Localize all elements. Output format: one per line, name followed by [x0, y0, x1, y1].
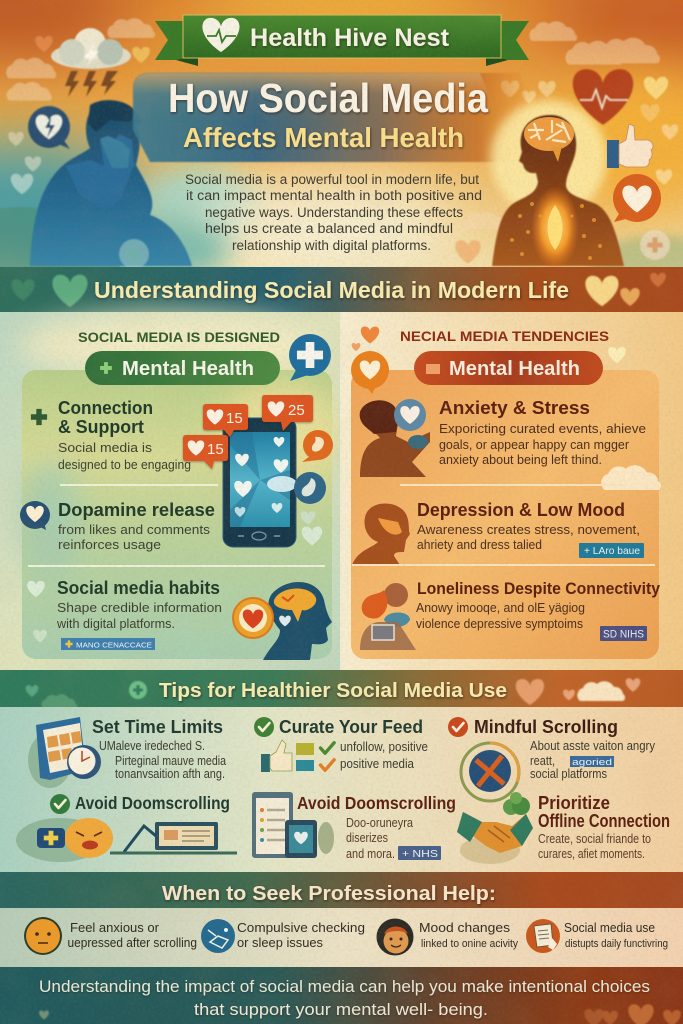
- badge: likes 15 lower: [183, 435, 228, 469]
- icon: blue bubble: [294, 472, 326, 504]
- tip: prioritize offline connection: [457, 792, 670, 861]
- tag: + NHS: [402, 848, 438, 860]
- title panel: [133, 73, 540, 162]
- icon: calendar and clock: [36, 717, 101, 780]
- tip: avoid doomscrolling left: [37, 793, 237, 858]
- item: connection and support: Social media is: [58, 440, 153, 455]
- item: connection and support: [31, 398, 191, 472]
- illustration: phone: [223, 418, 297, 547]
- closing message: that support your mental well- being.: [194, 1000, 488, 1019]
- badge: likes 15 lower: 15: [207, 441, 224, 458]
- item: dopamine release: from likes and comments: [58, 522, 211, 537]
- decorative hearts and clouds in hero: [6, 18, 678, 264]
- sign: anxious after scrolling: [24, 917, 197, 955]
- item: anxiety and stress: Exporicting curated events, ahieve: [439, 421, 646, 436]
- band icons: [26, 678, 640, 709]
- badge: likes 25: [262, 395, 313, 431]
- item: anxiety and stress: anxiety about being left thind.: [439, 452, 602, 467]
- sign: anxious after scrolling: Feel anxious or: [70, 920, 160, 935]
- section heading: Tips for Healthier Social Media Use: [159, 680, 507, 702]
- icon: plus square: [37, 828, 65, 848]
- sign: mood changes: linked to onine acivity: [421, 938, 518, 950]
- icon: plus badge bottom-left: [119, 239, 149, 269]
- panel: warning signs: [0, 908, 683, 967]
- badge: likes 15 upper: 15: [226, 410, 243, 427]
- intro text: negative ways. Understanding these effects: [205, 205, 463, 220]
- sign: disrupts daily functioning: [526, 919, 668, 953]
- item: anxiety and stress: Anxiety & Stress: [439, 398, 590, 418]
- item: anxiety and stress: goals, or appear happy can mgger: [439, 437, 630, 452]
- sign: anxious after scrolling: uepressed after scrolling: [68, 935, 197, 950]
- intro text: [185, 172, 482, 253]
- tip: mindful scrolling: About asste vaiton angry: [530, 739, 656, 753]
- tip: curate your feed: Curate Your Feed: [279, 717, 423, 737]
- tip: avoid doomscrolling left: Avoid Doomscrolling: [75, 793, 230, 813]
- tip: avoid doomscrolling centre: Avoid Doomscrolling: [297, 793, 456, 813]
- icon: plus badge right: [640, 230, 670, 260]
- tip: set time limits: UMaleve iredeched S.: [99, 739, 205, 753]
- item: dopamine release: [20, 500, 215, 552]
- illustration: healthy person with brain: [491, 100, 624, 270]
- icon: broken heart speech bubble: [28, 106, 70, 149]
- icon: heart bubble: [20, 501, 50, 530]
- item: depression and low mood: Depression & Low Mood: [417, 500, 625, 520]
- tag: [61, 638, 155, 650]
- tip: avoid doomscrolling centre: [252, 792, 456, 861]
- icon: plus speech bubble: [289, 334, 331, 381]
- section band: tips: [0, 670, 683, 709]
- sign: compulsive checking: [201, 919, 365, 953]
- tag: [570, 756, 614, 768]
- icon: heart logo: [202, 18, 240, 52]
- intro text: Social media is a powerful tool in modern life, but: [185, 172, 479, 187]
- tip: curate your feed: [254, 717, 428, 772]
- item: depression and low mood: [352, 500, 644, 565]
- tip: curate your feed: unfollow, positive: [340, 740, 428, 754]
- icon: laptop: [110, 822, 237, 853]
- pill: mental health: [85, 351, 280, 385]
- background: hero: [0, 0, 683, 317]
- item: social media habits: Shape credible information: [57, 600, 222, 615]
- tip: curate your feed: positive media: [340, 757, 414, 771]
- item: loneliness: [360, 579, 660, 650]
- icon: heart with pulse: [573, 69, 633, 125]
- tip: avoid doomscrolling centre: Doo-oruneyra: [346, 816, 413, 830]
- item: connection and support: designed to be engaging: [58, 457, 191, 472]
- section heading: Understanding Social Media in Modern Life: [94, 277, 569, 303]
- item: loneliness: Loneliness Despite Connectivity: [417, 579, 660, 598]
- item: social media habits: Social media habits: [57, 578, 220, 598]
- tag: [579, 543, 644, 558]
- panel: positive effects: [0, 312, 340, 670]
- tip: set time limits: [36, 717, 226, 781]
- badge: likes 25: 25: [288, 402, 305, 419]
- section band: understanding: [0, 267, 683, 312]
- item: depression and low mood: Awareness creates stress, novement,: [417, 522, 640, 537]
- icon: focus ring: [461, 743, 519, 801]
- title: How Social Media: [168, 75, 489, 121]
- pill: mental health: [414, 351, 603, 385]
- icon: thumbs up: [607, 124, 653, 168]
- icon: head with brain and heart bubble: [233, 582, 332, 660]
- icon: orange heart bubble: [613, 174, 661, 222]
- sign: mood changes: [376, 918, 518, 956]
- tip: avoid doomscrolling centre: diserizes: [346, 831, 388, 845]
- tag: [398, 846, 441, 860]
- icon: orange bubble: [351, 351, 389, 394]
- item: connection and support: & Support: [58, 417, 144, 437]
- badge: likes 15 upper: [203, 404, 248, 437]
- sign: mood changes: Mood changes: [419, 920, 511, 935]
- icon: tablet and phone: [252, 792, 334, 858]
- intro text: relationship with digital platforms.: [232, 238, 431, 253]
- item: dopamine release: Dopamine release: [58, 500, 215, 520]
- title: Affects Mental Health: [183, 122, 464, 153]
- icon: storm cloud with lightning: [51, 28, 131, 97]
- tag: agoried: [572, 757, 612, 768]
- tip: set time limits: Set Time Limits: [92, 717, 223, 737]
- item: depression and low mood: ahriety and dress talied: [417, 537, 542, 552]
- banner: Health Hive Nest: [155, 15, 529, 66]
- tip: mindful scrolling: Mindful Scrolling: [474, 717, 618, 737]
- tag: MANO CENACCACE: [76, 640, 152, 650]
- icon: lonely figures: [360, 583, 416, 650]
- pill: mental health: Mental Health: [449, 358, 580, 380]
- panel: tips: [0, 707, 683, 872]
- band icons: [11, 273, 666, 307]
- tip: prioritize offline connection: Create, social friande to: [538, 832, 651, 846]
- title: [168, 75, 489, 153]
- icon: brain: [524, 117, 574, 162]
- tip: avoid doomscrolling centre: and mora.: [346, 847, 395, 861]
- footer band: [0, 967, 683, 1024]
- sign: compulsive checking: or sleep issues: [237, 935, 323, 950]
- intro text: it can impact mental health in both positive and: [186, 188, 482, 203]
- sign: disrupts daily functioning: distupts daily functivring: [565, 938, 668, 950]
- tip: set time limits: Pirteginal mauve media: [115, 754, 226, 768]
- section band: professional help: [0, 872, 683, 908]
- item: social media habits: [27, 578, 222, 650]
- item: anxiety and stress: [360, 398, 661, 490]
- tag: SD NIHS: [603, 628, 644, 640]
- icon: woman with phone: [360, 399, 430, 477]
- item: dopamine release: reinforces usage: [58, 537, 161, 552]
- panel kicker: NECIAL MEDIA TENDENCIES: [400, 328, 609, 344]
- brand name: Health Hive Nest: [250, 24, 450, 52]
- tip: mindful scrolling: [448, 717, 656, 801]
- tip: prioritize offline connection: curares, afiet moments.: [538, 847, 645, 861]
- closing message: Understanding the impact of social media can help you make intentional choices: [39, 977, 650, 996]
- closing message: [39, 977, 650, 1019]
- panel kicker: SOCIAL MEDIA IS DESIGNED: [78, 329, 280, 345]
- item: connection and support: Connection: [58, 398, 153, 418]
- tip: prioritize offline connection: Prioritize: [538, 793, 610, 813]
- sign: disrupts daily functioning: Social media use: [564, 920, 655, 935]
- icon: thumbs up: [261, 740, 292, 772]
- icon: orange bubble: [302, 430, 333, 462]
- icon: handshake with leaves: [457, 792, 533, 853]
- intro text: helps us create a balanced and mindful: [205, 221, 453, 236]
- icon: distressed emoji: [65, 818, 113, 858]
- item: loneliness: violence depressive symptoims: [416, 616, 583, 631]
- section heading: When to Seek Professional Help:: [162, 883, 496, 905]
- panel: negative effects: [340, 312, 683, 670]
- icon: sad head: [352, 504, 410, 565]
- sign: compulsive checking: Compulsive checking: [237, 920, 365, 935]
- tip: set time limits: tonanvsaition afth ang.: [115, 767, 225, 781]
- tag: + LAro baue: [584, 546, 640, 557]
- tip: mindful scrolling: social platforms: [530, 767, 607, 781]
- item: loneliness: Anowy imooqe, and olE yägiog: [416, 600, 585, 615]
- pill: mental health: Mental Health: [122, 358, 254, 380]
- tip: mindful scrolling: reatt,: [530, 754, 555, 768]
- item: social media habits: with digital platforms.: [56, 616, 175, 631]
- illustration: sad person silhouette: [30, 100, 192, 266]
